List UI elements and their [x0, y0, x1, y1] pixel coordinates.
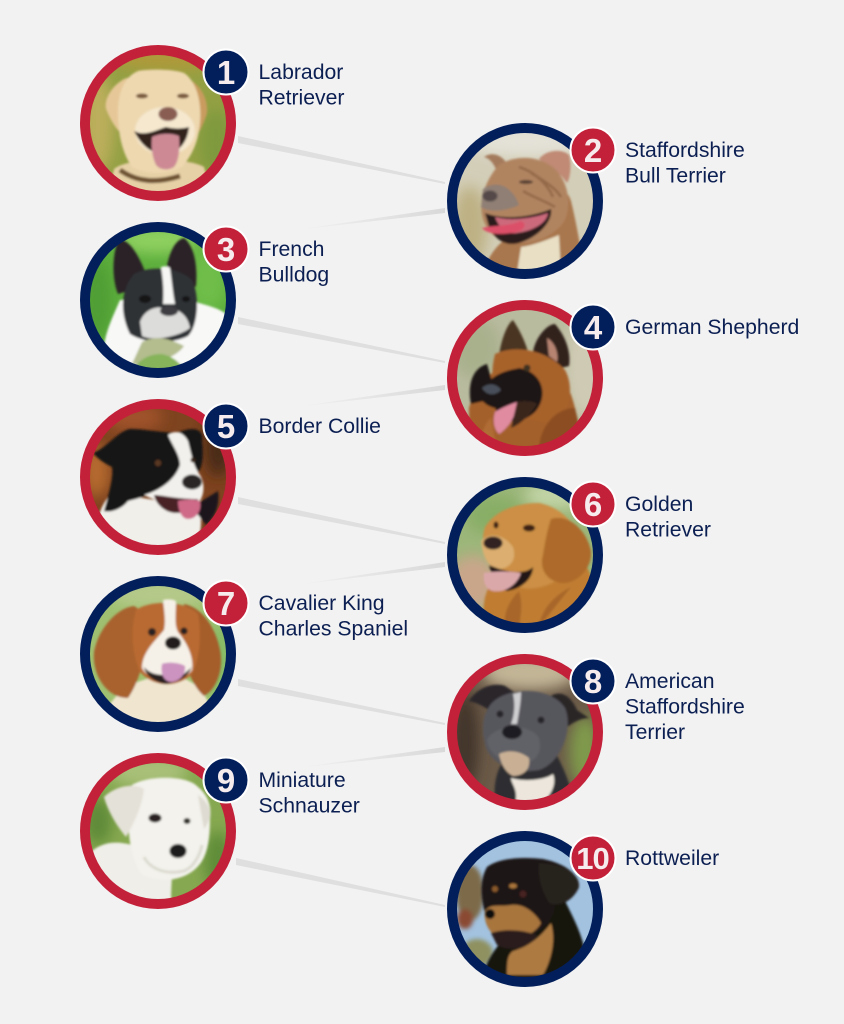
number badge 1: 1	[217, 54, 235, 91]
ring	[452, 482, 598, 628]
ring	[85, 404, 231, 550]
label: Golden	[625, 493, 693, 516]
panel: 7 Cavalier King Charles Spaniel	[85, 580, 408, 727]
ring	[85, 50, 231, 196]
number badge 2: 2	[584, 132, 602, 169]
label: Staffordshire	[625, 696, 745, 718]
label: Bull Terrier	[625, 164, 726, 188]
number badge 5: 5	[217, 408, 235, 445]
label: Bulldog	[258, 264, 329, 286]
ring	[85, 227, 231, 373]
label: Staffordshire	[625, 139, 745, 162]
photo: cavalier	[90, 586, 226, 722]
photo: border collie	[90, 409, 226, 532]
number badge 1	[204, 50, 248, 94]
number badge 3: 3	[217, 231, 235, 268]
ring	[85, 581, 231, 727]
panel: 4 German Shepherd	[450, 304, 799, 451]
label: Border Collie	[258, 415, 381, 438]
panel: 5 Border Collie	[82, 403, 381, 550]
number badge 4	[570, 304, 616, 350]
ring	[452, 659, 598, 805]
number badge 9: 9	[217, 762, 235, 799]
label: Rottweiler	[625, 847, 719, 870]
number badge 7	[204, 580, 248, 626]
photo: rottweiler	[455, 839, 595, 981]
label: Cavalier King	[258, 592, 385, 615]
photo: labrador	[90, 55, 226, 191]
panel: 1 Labrador Retriever	[82, 43, 344, 196]
panel: 9 Miniature Schnauzer	[84, 755, 360, 904]
label: German Shepherd	[625, 316, 799, 339]
label: Schnauzer	[258, 794, 360, 818]
photo: staffordshire	[457, 133, 593, 269]
label: Terrier	[625, 721, 685, 744]
label: Miniature	[258, 769, 346, 792]
photo: american staffordshire	[457, 664, 593, 800]
ring	[452, 128, 598, 274]
photo: german shepherd	[457, 310, 593, 446]
label: Retriever	[625, 518, 711, 542]
label: Retriever	[258, 86, 344, 110]
photo: golden retriever	[457, 487, 593, 623]
number badge 8	[570, 658, 616, 704]
panel: 6 Golden Retriever	[447, 481, 711, 628]
number badge 5	[204, 404, 248, 448]
ring	[85, 758, 231, 904]
number badge 7: 7	[217, 585, 235, 622]
number badge 6	[570, 482, 616, 526]
ring	[452, 836, 598, 982]
number badge 6: 6	[584, 486, 602, 523]
number badge 9	[204, 758, 248, 802]
label: French	[258, 238, 324, 261]
label: American	[625, 670, 714, 693]
connector lines	[236, 136, 445, 907]
number badge 2	[570, 128, 616, 172]
photo: miniature schnauzer	[90, 763, 226, 899]
number badge 8: 8	[584, 663, 602, 700]
label: Charles Spaniel	[258, 618, 408, 640]
panel: 8 American Staffordshire Terrier	[451, 654, 745, 805]
number badge 3	[204, 226, 248, 272]
label: Labrador	[258, 61, 343, 84]
ring	[452, 305, 598, 451]
number badge 4: 4	[584, 309, 603, 346]
photo: french bulldog	[90, 232, 226, 368]
panel: 10 Rottweiler	[452, 836, 719, 982]
number badge 10	[570, 836, 616, 880]
panel: 2 Staffordshire Bull Terrier	[452, 126, 745, 274]
number badge 10: 10	[576, 841, 609, 876]
panel: 3 French Bulldog	[84, 226, 329, 373]
